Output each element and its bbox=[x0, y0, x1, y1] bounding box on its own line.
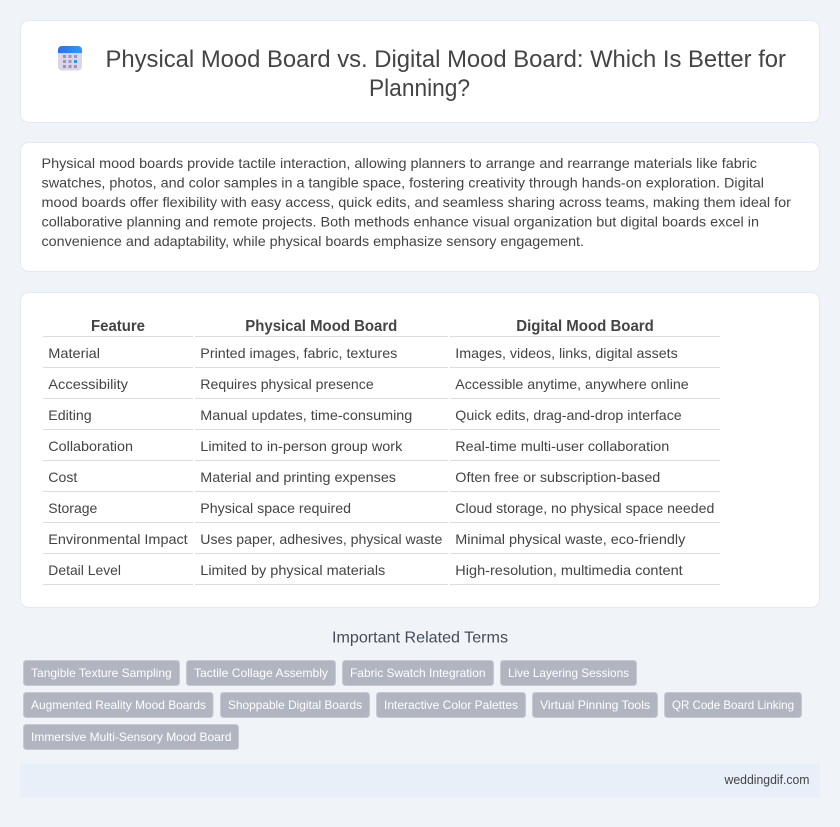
table row: cost: Cost bbox=[48, 469, 77, 485]
table row: collaboration bbox=[48, 438, 669, 454]
table row: editing: Manual updates, time-consuming bbox=[200, 407, 412, 423]
table row: material: Material bbox=[48, 345, 100, 361]
table header row bbox=[91, 318, 654, 335]
tag: tangible texture sampling: Tangible Texture Sampling bbox=[31, 666, 172, 680]
table row: editing: Quick edits, drag-and-drop interface bbox=[455, 407, 682, 423]
table row: accessibility: Requires physical presence bbox=[200, 376, 374, 392]
table row: cost bbox=[48, 469, 660, 485]
table row: accessibility: Accessible anytime, anywhere online bbox=[455, 376, 689, 392]
tag: live layering sessions bbox=[500, 660, 636, 686]
table row: storage: Storage bbox=[48, 500, 98, 516]
text block: introduction paragraph bbox=[42, 155, 791, 249]
table row: detail level: Detail Level bbox=[48, 562, 121, 578]
tag: fabric swatch integration bbox=[342, 660, 494, 686]
table row: detail level: High-resolution, multimedia content bbox=[455, 562, 683, 578]
tag: tactile collage assembly bbox=[186, 660, 336, 686]
table row: cost: Material and printing expenses bbox=[200, 469, 396, 485]
table row: collaboration: Limited to in-person group work bbox=[200, 438, 403, 454]
table row: storage: Physical space required bbox=[200, 500, 351, 516]
text block: introduction paragraph: convenience and adaptability, while physical boards emphasize sensory engagement. bbox=[42, 233, 584, 249]
title: Physical Mood Board vs. Digital Mood Board: Which Is Better for bbox=[106, 46, 786, 73]
table header row: Physical Mood Board bbox=[245, 318, 397, 335]
table row: detail level: Limited by physical materials bbox=[200, 562, 385, 578]
footer bbox=[20, 764, 820, 797]
tag: live layering sessions: Live Layering Sessions bbox=[508, 666, 629, 680]
table row: editing bbox=[48, 407, 682, 423]
footer: weddingdif.com bbox=[724, 773, 810, 787]
table row: material bbox=[48, 345, 678, 361]
tag: shoppable digital boards bbox=[220, 692, 370, 718]
table row: cost: Often free or subscription-based bbox=[455, 469, 660, 485]
table row: accessibility bbox=[48, 376, 689, 392]
table row: material: Printed images, fabric, textures bbox=[200, 345, 397, 361]
icon: calendar bbox=[58, 46, 82, 70]
tag: interactive color palettes bbox=[376, 692, 526, 718]
table row: storage bbox=[48, 500, 714, 516]
tag: tangible texture sampling bbox=[24, 660, 180, 686]
heading: important related terms: Important Related Terms bbox=[332, 630, 508, 646]
table row: detail level bbox=[48, 562, 683, 578]
tag: tactile collage assembly: Tactile Collage Assembly bbox=[194, 666, 328, 680]
tag: qr code board linking: QR Code Board Linking bbox=[672, 698, 794, 712]
table row: environmental impact: Uses paper, adhesives, physical waste bbox=[200, 531, 443, 547]
panel: comparison table bbox=[20, 292, 820, 608]
table row: environmental impact: Environmental Impact bbox=[48, 531, 188, 547]
tag: qr code board linking bbox=[664, 692, 802, 718]
text block: introduction paragraph: Physical mood boards provide tactile interaction, allowing planners to arrange and rearrange materials like fabric bbox=[42, 155, 757, 171]
tag: virtual pinning tools: Virtual Pinning Tools bbox=[540, 698, 650, 712]
tag: augmented reality mood boards bbox=[24, 692, 213, 718]
table row: storage: Cloud storage, no physical space needed bbox=[455, 500, 714, 516]
text block: introduction paragraph: collaborative planning and remote projects. Both methods enhance visual organization but digital boards excel in bbox=[42, 214, 759, 230]
table row: collaboration: Real-time multi-user collaboration bbox=[455, 438, 669, 454]
related terms tags bbox=[24, 660, 802, 750]
tag: shoppable digital boards: Shoppable Digital Boards bbox=[228, 698, 362, 712]
table row: collaboration: Collaboration bbox=[48, 438, 133, 454]
tag: virtual pinning tools bbox=[532, 692, 658, 718]
tag: immersive multi-sensory mood board bbox=[24, 724, 238, 750]
text block: introduction paragraph: mood boards offer flexibility with easy access, quick edits, and seamless sharing across teams, making them ideal for bbox=[42, 194, 791, 210]
tag: interactive color palettes: Interactive Color Palettes bbox=[384, 698, 518, 712]
table header row: Digital Mood Board bbox=[516, 318, 654, 335]
table header row: Feature bbox=[91, 318, 145, 335]
panel: introduction bbox=[20, 142, 820, 272]
table row: material: Images, videos, links, digital assets bbox=[455, 345, 678, 361]
text block: introduction paragraph: swatches, photos, and color samples in a tangible space, fostering creativity through hands-on exploration. Digital bbox=[42, 174, 764, 190]
tag: fabric swatch integration: Fabric Swatch Integration bbox=[350, 666, 486, 680]
table row: accessibility: Accessibility bbox=[48, 376, 128, 392]
panel: title header bbox=[20, 20, 820, 122]
table row: editing: Editing bbox=[48, 407, 92, 423]
title bbox=[106, 46, 786, 102]
tag: augmented reality mood boards: Augmented Reality Mood Boards bbox=[31, 698, 206, 712]
table row: environmental impact bbox=[48, 531, 685, 547]
tag: immersive multi-sensory mood board: Immersive Multi-Sensory Mood Board bbox=[31, 730, 232, 744]
table row: environmental impact: Minimal physical waste, eco-friendly bbox=[455, 531, 685, 547]
title: Planning? bbox=[369, 75, 470, 102]
